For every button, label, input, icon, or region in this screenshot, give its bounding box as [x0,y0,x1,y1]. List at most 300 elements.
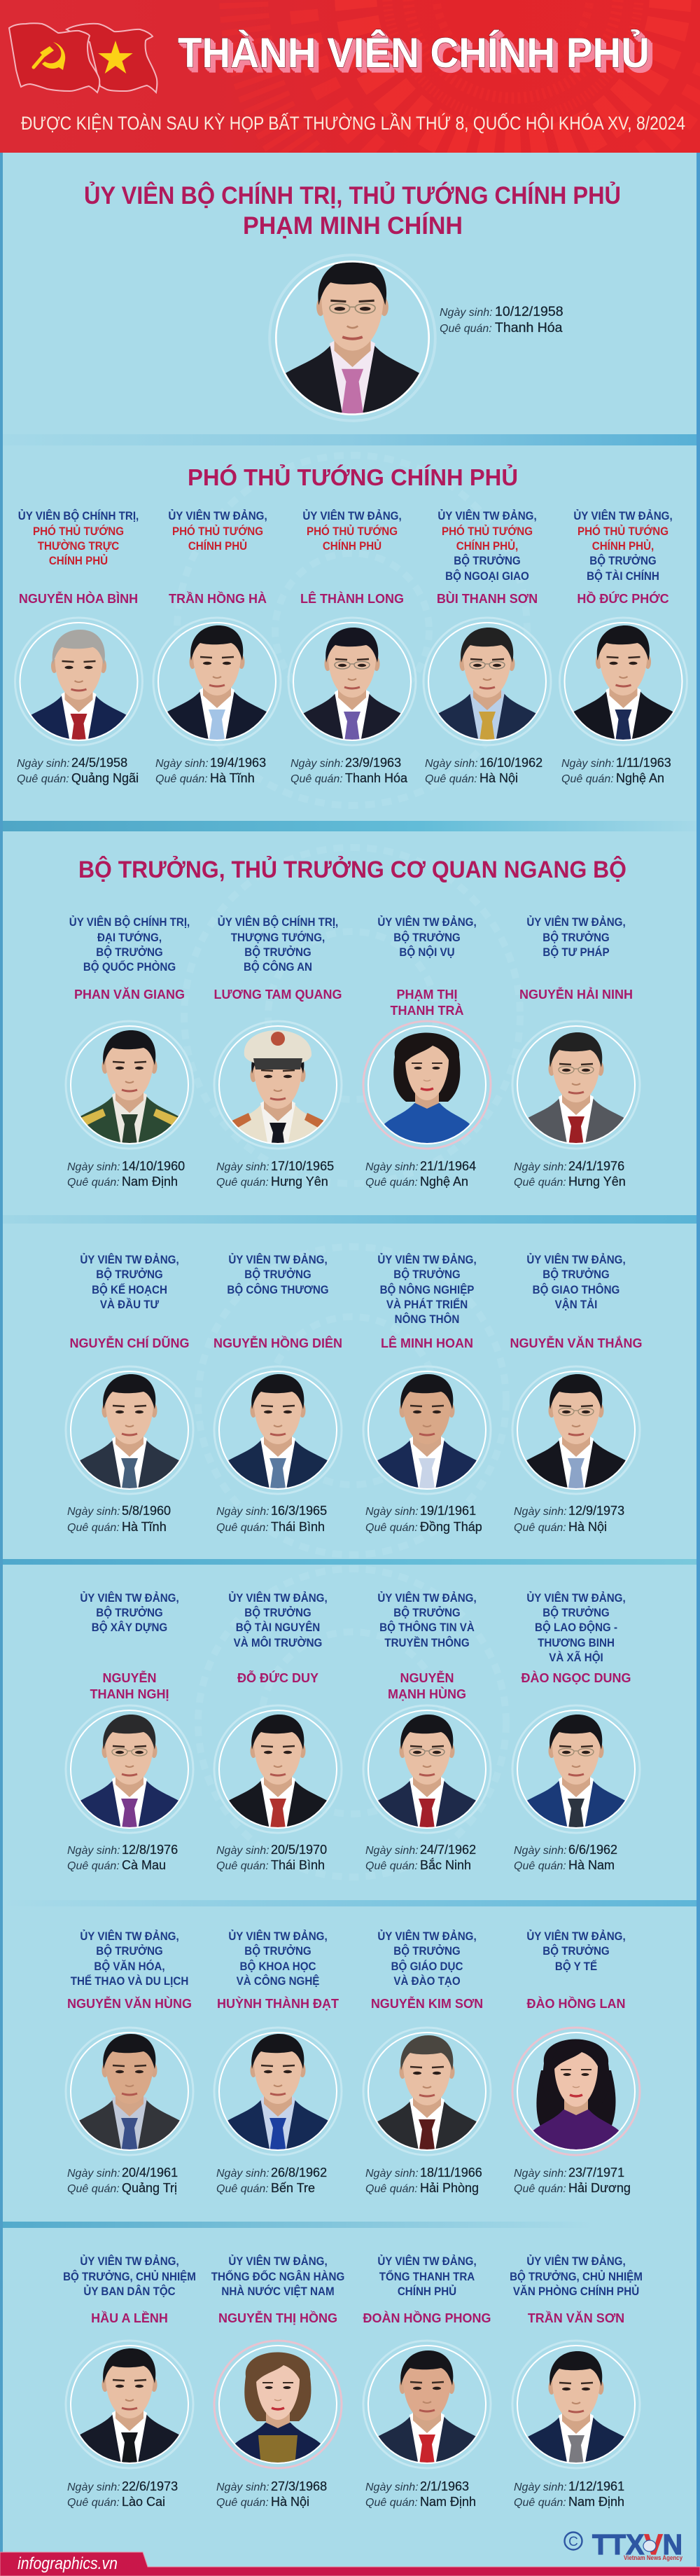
person: Lê Thành Long [288,508,416,785]
role: CHÍNH PHỦ [398,2284,456,2298]
portrait [214,1021,342,1165]
portrait [512,1705,640,1841]
role: CHÍNH PHỦ [49,553,108,567]
info: Quê quán: [561,773,614,785]
role: VÀ ĐẦU TƯ [100,1297,160,1311]
person: Nguyễn Thanh Nghị [66,1591,193,1872]
info: Quê quán: [514,1522,566,1534]
role: BỘ TRƯỞNG [393,930,461,944]
person: Nguyễn Thị Hồng [211,2254,344,2509]
info: Hưng Yên [568,1175,626,1189]
info: Quê quán: [365,2183,418,2195]
portrait [560,618,687,752]
info: Hải Phòng [420,2181,479,2195]
role: ỦY VIÊN TW ĐẢNG, [377,1252,477,1266]
name: LÊ MINH HOAN [381,1336,473,1350]
name: NGUYỄN KIM SƠN [371,1996,483,2011]
name: ĐÀO NGỌC DUNG [521,1670,631,1685]
role: BỘ CÔNG THƯƠNG [227,1282,329,1296]
info: Hà Nội [271,2495,309,2509]
name: NGUYỄN [400,1670,454,1685]
role: BỘ TRƯỞNG [393,1267,461,1281]
portrait [288,618,416,754]
info: 24/1/1976 [568,1159,624,1173]
role: NHÀ NƯỚC VIỆT NAM [221,2284,335,2298]
role: BỘ NÔNG NGHIỆP [380,1282,475,1296]
role: ỦY VIÊN TW ĐẢNG, [526,1252,626,1266]
role: ỦY VIÊN TW ĐẢNG, [228,1591,328,1605]
info: Ngày sinh: [67,2481,120,2493]
portrait [424,618,551,754]
person: Hầu A Lềnh [63,2254,196,2509]
portrait [512,2341,640,2477]
name: TRẦN HỒNG HÀ [169,591,267,606]
portrait [66,1021,193,1156]
role: THƯỢNG TƯỚNG, [231,930,325,944]
role: CHÍNH PHỦ, [456,539,518,553]
portrait [66,2341,193,2474]
role: ỦY VIÊN TW ĐẢNG, [526,915,626,929]
info: 12/9/1973 [568,1504,624,1518]
person: Phạm Thị Thanh Trà [363,915,491,1189]
person: Phan Văn Giang [66,915,193,1189]
info: Ngày sinh: [216,2168,270,2180]
role: BỘ TRƯỞNG [542,1944,610,1958]
info: Quê quán: [514,1860,566,1872]
name: HUỲNH THÀNH ĐẠT [217,1996,339,2011]
info: 24/7/1962 [420,1843,476,1857]
info: Phạm Minh Chính: Thanh Hóa [495,320,563,335]
portrait: Phạm Minh Chính [270,255,435,424]
name: NGUYỄN [102,1670,157,1685]
role: BỘ TÀI NGUYÊN [236,1620,320,1634]
portrait [66,1366,193,1500]
role: NÔNG THÔN [395,1312,459,1326]
person: Hồ Đức Phớc [560,508,687,785]
info: 1/12/1961 [568,2479,624,2493]
name: ĐOÀN HỒNG PHONG [363,2311,491,2325]
name: PHAN VĂN GIANG [74,987,185,1002]
info: Nghệ An [420,1175,468,1189]
left edge stripe [0,153,3,2576]
info: Thái Bình [271,1520,325,1534]
role: BỘ TRƯỞNG [454,553,521,567]
heading: prime minister name: PHẠM MINH CHÍNH [243,212,463,240]
info: 12/8/1976 [122,1843,178,1857]
role: BỘ TRƯỞNG [589,553,657,567]
role: TRUYỀN THÔNG [384,1635,470,1649]
icon: copyright [564,2533,582,2549]
panel: ministers row 1 [66,856,640,1189]
role: BỘ THÔNG TIN VÀ [379,1620,475,1634]
info: Quê quán: [67,1177,120,1189]
info: 2/1/1963 [420,2479,469,2493]
icon: flags [9,23,157,92]
role: BỘ TRƯỞNG [96,1605,163,1619]
info: Quê quán: [67,1522,120,1534]
info: Ngày sinh: [514,2168,567,2180]
role: ỦY VIÊN TW ĐẢNG, [80,1252,179,1266]
info: 19/4/1963 [210,756,266,770]
name: TRẦN VĂN SƠN [528,2311,624,2325]
name: NGUYỄN HẢI NINH [519,987,633,1002]
role: BỘ CÔNG AN [244,960,312,974]
role: BỘ VĂN HÓA, [94,1959,165,1973]
person: Nguyễn Văn Thắng [510,1252,643,1534]
info: Hải Dương [568,2181,631,2195]
person: Huỳnh Thành Đạt [214,1929,342,2195]
person: Nguyễn Hòa Bình [15,508,143,785]
info: Quê quán: [365,1860,418,1872]
person: Nguyễn Hải Ninh [512,915,640,1189]
info: 27/3/1968 [271,2479,327,2493]
role: BỘ TÀI CHÍNH [587,569,659,583]
info: Ngày sinh: [365,1161,419,1173]
info: Quê quán: [216,2497,269,2509]
role: PHÓ THỦ TƯỚNG [172,524,263,538]
logo wordmark: TTXVN [592,2528,682,2561]
portrait [363,2028,491,2161]
panel: deputy prime ministers [15,464,687,785]
person: Nguyễn Mạnh Hùng [363,1591,491,1872]
portrait [363,1021,491,1155]
role: ỦY VIÊN TW ĐẢNG, [302,508,402,522]
role: THƯỜNG TRỰC [38,539,120,553]
footer site name: infographics.vn [18,2554,118,2573]
info: 18/11/1966 [420,2166,482,2180]
info: Quê quán: [514,1177,566,1189]
role: BỘ TRƯỞNG [244,1944,312,1958]
person: Nguyễn Kim Sơn [363,1929,491,2195]
role: BỘ TRƯỞNG [542,1267,610,1281]
name: PHẠM THỊ [396,988,458,1002]
role: BỘ XÂY DỰNG [92,1620,167,1634]
info: Quê quán: [216,1860,269,1872]
person: Lê Minh Hoan [363,1252,491,1534]
role: ỦY VIÊN TW ĐẢNG, [228,1929,328,1943]
portrait [214,2341,342,2474]
icon: national flag [66,24,157,92]
info: Hà Nam [568,1858,615,1872]
role: ỦY VIÊN TW ĐẢNG, [377,915,477,929]
person: Nguyễn Hồng Diên [214,1252,342,1534]
name: HỒ ĐỨC PHỚC [577,591,669,606]
separator bars [3,434,696,2228]
role: BỘ KHOA HỌC [239,1959,316,1973]
info: 14/10/1960 [122,1159,185,1173]
role: BỘ TRƯỞNG [244,1605,312,1619]
role: THƯƠNG BINH [538,1637,615,1649]
info: Quê quán: [216,1522,269,1534]
info: Quê quán: [67,2497,120,2509]
info: Ngày sinh: [290,758,344,770]
info: 5/8/1960 [122,1504,171,1518]
info: Hà Tĩnh [210,771,255,785]
info: Quê quán: [514,2183,566,2195]
name: THANH TRÀ [391,1003,463,1018]
role: ỦY VIÊN BỘ CHÍNH TRỊ, [218,915,338,929]
role: ỦY VIÊN TW ĐẢNG, [80,1929,179,1943]
info: Bắc Ninh [420,1857,471,1872]
info: Ngày sinh: [514,2481,567,2493]
info: Quê quán: [290,773,343,785]
role: PHÓ THỦ TƯỚNG [33,524,124,538]
info: 6/6/1962 [568,1843,617,1857]
role: BỘ TRƯỞNG [244,945,312,959]
info: Ngày sinh: [216,1506,270,1518]
name: LÊ THÀNH LONG [300,591,404,606]
role: ỦY BAN DÂN TỘC [83,2284,176,2298]
info: Quê quán: [216,1177,269,1189]
role: ỦY VIÊN TW ĐẢNG, [228,2254,328,2268]
role: ỦY VIÊN TW ĐẢNG, [168,508,267,522]
role: ỦY VIÊN TW ĐẢNG, [377,1591,477,1605]
role: VÀ XÃ HỘI [549,1649,603,1664]
heading: prime minister role: ỦY VIÊN BỘ CHÍNH TRỊ, THỦ TƯỚNG CHÍNH PHỦ [84,181,621,209]
role: ĐẠI TƯỚNG, [97,930,162,944]
info: Quê quán: [365,2497,418,2509]
role: ỦY VIÊN TW ĐẢNG, [573,508,673,522]
name: NGUYỄN CHÍ DŨNG [69,1336,190,1350]
logo: TTXVN [564,2528,683,2562]
info: Ngày sinh: [216,1161,270,1173]
logo tagline: Vietnam News Agency [624,2554,683,2562]
role: BỘ TRƯỞNG [542,1605,610,1619]
name: NGUYỄN VĂN HÙNG [67,1996,192,2011]
role: VÀ MÔI TRƯỜNG [234,1635,322,1649]
role: THỂ THAO VÀ DU LỊCH [71,1974,188,1988]
role: BỘ TRƯỞNG [244,1267,312,1281]
person: Lương Tam Quang [214,915,342,1189]
role: BỘ TRƯỞNG [96,945,163,959]
role: BỘ QUỐC PHÒNG [83,959,176,974]
icon: party flag [9,23,99,92]
info: Nghệ An [616,771,664,785]
role: ỦY VIÊN TW ĐẢNG, [526,1591,626,1605]
role: VÀ CÔNG NGHỆ [237,1974,319,1988]
person: Đỗ Đức Duy [214,1591,342,1872]
role: BỘ KẾ HOẠCH [92,1282,167,1296]
portrait [214,2028,342,2160]
info: 16/3/1965 [271,1504,327,1518]
info: Ngày sinh: [514,1161,567,1173]
panel: ministers row 4 [66,1929,640,2195]
info: Ngày sinh: [365,2168,419,2180]
info: Ngày sinh: [216,1845,270,1857]
info: 22/6/1973 [122,2479,178,2493]
name: BÙI THANH SƠN [437,591,538,606]
info: Bến Tre [271,2181,315,2195]
panel: ministers row 3 [66,1591,640,1872]
portrait [153,618,281,752]
role: PHÓ THỦ TƯỚNG [307,524,398,538]
role: ỦY VIÊN TW ĐẢNG, [526,2254,626,2268]
info: 24/5/1958 [71,756,127,770]
info: Hà Tĩnh [122,1520,167,1534]
info: Quê quán: [17,773,69,785]
info: Thanh Hóa [345,771,408,785]
person: Đào Ngọc Dung [512,1591,640,1872]
title: THÀNH VIÊN CHÍNH PHỦ [178,29,650,76]
right edge stripe [696,153,700,2576]
role: VẬN TẢI [555,1297,597,1311]
role: ỦY VIÊN TW ĐẢNG, [526,1929,626,1943]
info: Ngày sinh: [365,2481,419,2493]
info: 23/9/1963 [345,756,401,770]
panel: ministers row 2 [66,1252,643,1534]
role: CHÍNH PHỦ [323,539,382,553]
role: BỘ TRƯỞNG [96,1944,163,1958]
info: Quê quán: [67,2183,120,2195]
name: THANH NGHỊ [90,1687,169,1701]
role: VÀ ĐÀO TẠO [393,1974,461,1988]
person: Trần Văn Sơn [510,2254,643,2509]
person: Đào Hồng Lan [512,1929,640,2195]
info: Ngày sinh: [561,758,615,770]
info: Phạm Minh Chính: 10/12/1958 [495,304,564,319]
info: Thái Bình [271,1858,325,1872]
info: 17/10/1965 [271,1159,334,1173]
info: Ngày sinh: [67,1161,120,1173]
role: ỦY VIÊN BỘ CHÍNH TRỊ, [69,915,190,929]
info: Ngày sinh: [67,1845,120,1857]
info: Cà Mau [122,1858,166,1872]
icon: globe [643,2540,656,2551]
portrait [214,1705,342,1841]
role: ỦY VIÊN TW ĐẢNG, [80,2254,179,2268]
info: Quê quán: [67,1860,120,1872]
info: Ngày sinh: [514,1845,567,1857]
info: Nam Định [568,2495,624,2509]
name: NGUYỄN HỒNG DIÊN [214,1336,342,1350]
info: Ngày sinh: [365,1506,419,1518]
info: Phạm Minh Chính: Quê quán: [440,323,492,335]
info: 20/4/1961 [122,2166,178,2180]
portrait [214,1366,342,1500]
info: 1/11/1963 [616,756,671,770]
info: Ngày sinh: [365,1845,419,1857]
info: 21/1/1964 [420,1159,476,1173]
info: 26/8/1962 [271,2166,327,2180]
role: ỦY VIÊN TW ĐẢNG, [377,1929,477,1943]
info: Ngày sinh: [155,758,209,770]
person: Trần Hồng Hà [153,508,281,785]
name: NGUYỄN VĂN THẮNG [510,1336,643,1350]
portrait [512,2028,640,2161]
name: LƯƠNG TAM QUANG [214,988,342,1002]
portrait [66,2028,193,2160]
info: Ngày sinh: [216,2481,270,2493]
info: Ngày sinh: [425,758,478,770]
person: Đoàn Hồng Phong [363,2254,491,2509]
info: 16/10/1962 [479,756,542,770]
role: ỦY VIÊN TW ĐẢNG, [228,1252,328,1266]
portrait [363,2341,491,2477]
info: Lào Cai [122,2495,165,2509]
info: Hà Nội [479,771,518,785]
footer band [0,2552,700,2576]
person: Bùi Thanh Sơn [424,508,551,785]
role: ỦY VIÊN BỘ CHÍNH TRỊ, [18,508,139,522]
role: BỘ TƯ PHÁP [542,945,610,959]
role: THỐNG ĐỐC NGÂN HÀNG [211,2269,344,2283]
info: Nam Định [122,1175,178,1189]
info: Hà Nội [568,1520,607,1534]
info: Quảng Trị [122,2181,177,2195]
info: Quê quán: [514,2497,566,2509]
role: VĂN PHÒNG CHÍNH PHỦ [513,2284,639,2298]
info: Hưng Yên [271,1175,328,1189]
role: VÀ PHÁT TRIỂN [386,1297,468,1311]
portrait [512,1021,640,1158]
role: BỘ TRƯỞNG [542,930,610,944]
name: MẠNH HÙNG [388,1687,466,1701]
role: BỘ GIÁO DỤC [391,1959,463,1973]
portrait [512,1366,640,1500]
info: Ngày sinh: [514,1506,567,1518]
role: BỘ TRƯỞNG, CHỦ NHIỆM [510,2269,643,2283]
header banner [0,0,700,153]
info: 19/1/1961 [420,1504,476,1518]
name: HẦU A LỀNH [91,2311,168,2325]
role: PHÓ THỦ TƯỚNG [442,524,533,538]
person: Nguyễn Văn Hùng [66,1929,193,2195]
role: ỦY VIÊN TW ĐẢNG, [438,508,537,522]
info: Quê quán: [365,1177,418,1189]
icon: copyright: C [568,2535,578,2549]
panel: ministers row 5 [63,2254,643,2509]
role: BỘ GIAO THÔNG [533,1282,620,1296]
info: Quê quán: [365,1522,418,1534]
role: BỘ LAO ĐỘNG - [535,1620,617,1634]
role: BỘ TRƯỞNG [393,1944,461,1958]
role: BỘ NỘI VỤ [399,945,455,959]
role: BỘ NGOẠI GIAO [445,569,529,583]
info: Quê quán: [216,2183,269,2195]
info: Nam Định [420,2495,476,2509]
info: Ngày sinh: [67,1506,120,1518]
name: ĐỖ ĐỨC DUY [237,1670,318,1685]
name: NGUYỄN THỊ HỒNG [218,2311,337,2325]
info: Quê quán: [155,773,208,785]
info: Phạm Minh Chính: Ngày sinh: [440,307,493,319]
role: BỘ TRƯỞNG [393,1605,461,1619]
panel: prime minister [84,181,621,424]
role: BỘ Y TẾ [555,1959,597,1973]
name: ĐÀO HỒNG LAN [526,1996,626,2011]
role: TỔNG THANH TRA [379,2269,475,2283]
info: Đồng Tháp [420,1520,482,1534]
info: 20/5/1970 [271,1843,327,1857]
info: Quảng Ngãi [71,771,139,785]
role: BỘ TRƯỞNG, CHỦ NHIỆM [63,2269,196,2283]
info: 23/7/1971 [568,2166,624,2180]
role: ỦY VIÊN TW ĐẢNG, [80,1591,179,1605]
portrait [363,1705,491,1841]
person: Nguyễn Chí Dũng [66,1252,193,1534]
portrait [363,1366,491,1500]
name: NGUYỄN HÒA BÌNH [19,591,138,606]
heading: deputy prime ministers: PHÓ THỦ TƯỚNG CHÍNH PHỦ [188,464,518,490]
role: BỘ TRƯỞNG [96,1267,163,1281]
info: Ngày sinh: [17,758,70,770]
role: PHÓ THỦ TƯỚNG [578,524,668,538]
info: Ngày sinh: [67,2168,120,2180]
role: CHÍNH PHỦ [188,539,247,553]
role: ỦY VIÊN TW ĐẢNG, [377,2254,477,2268]
info: Quê quán: [425,773,477,785]
portrait [15,618,143,756]
